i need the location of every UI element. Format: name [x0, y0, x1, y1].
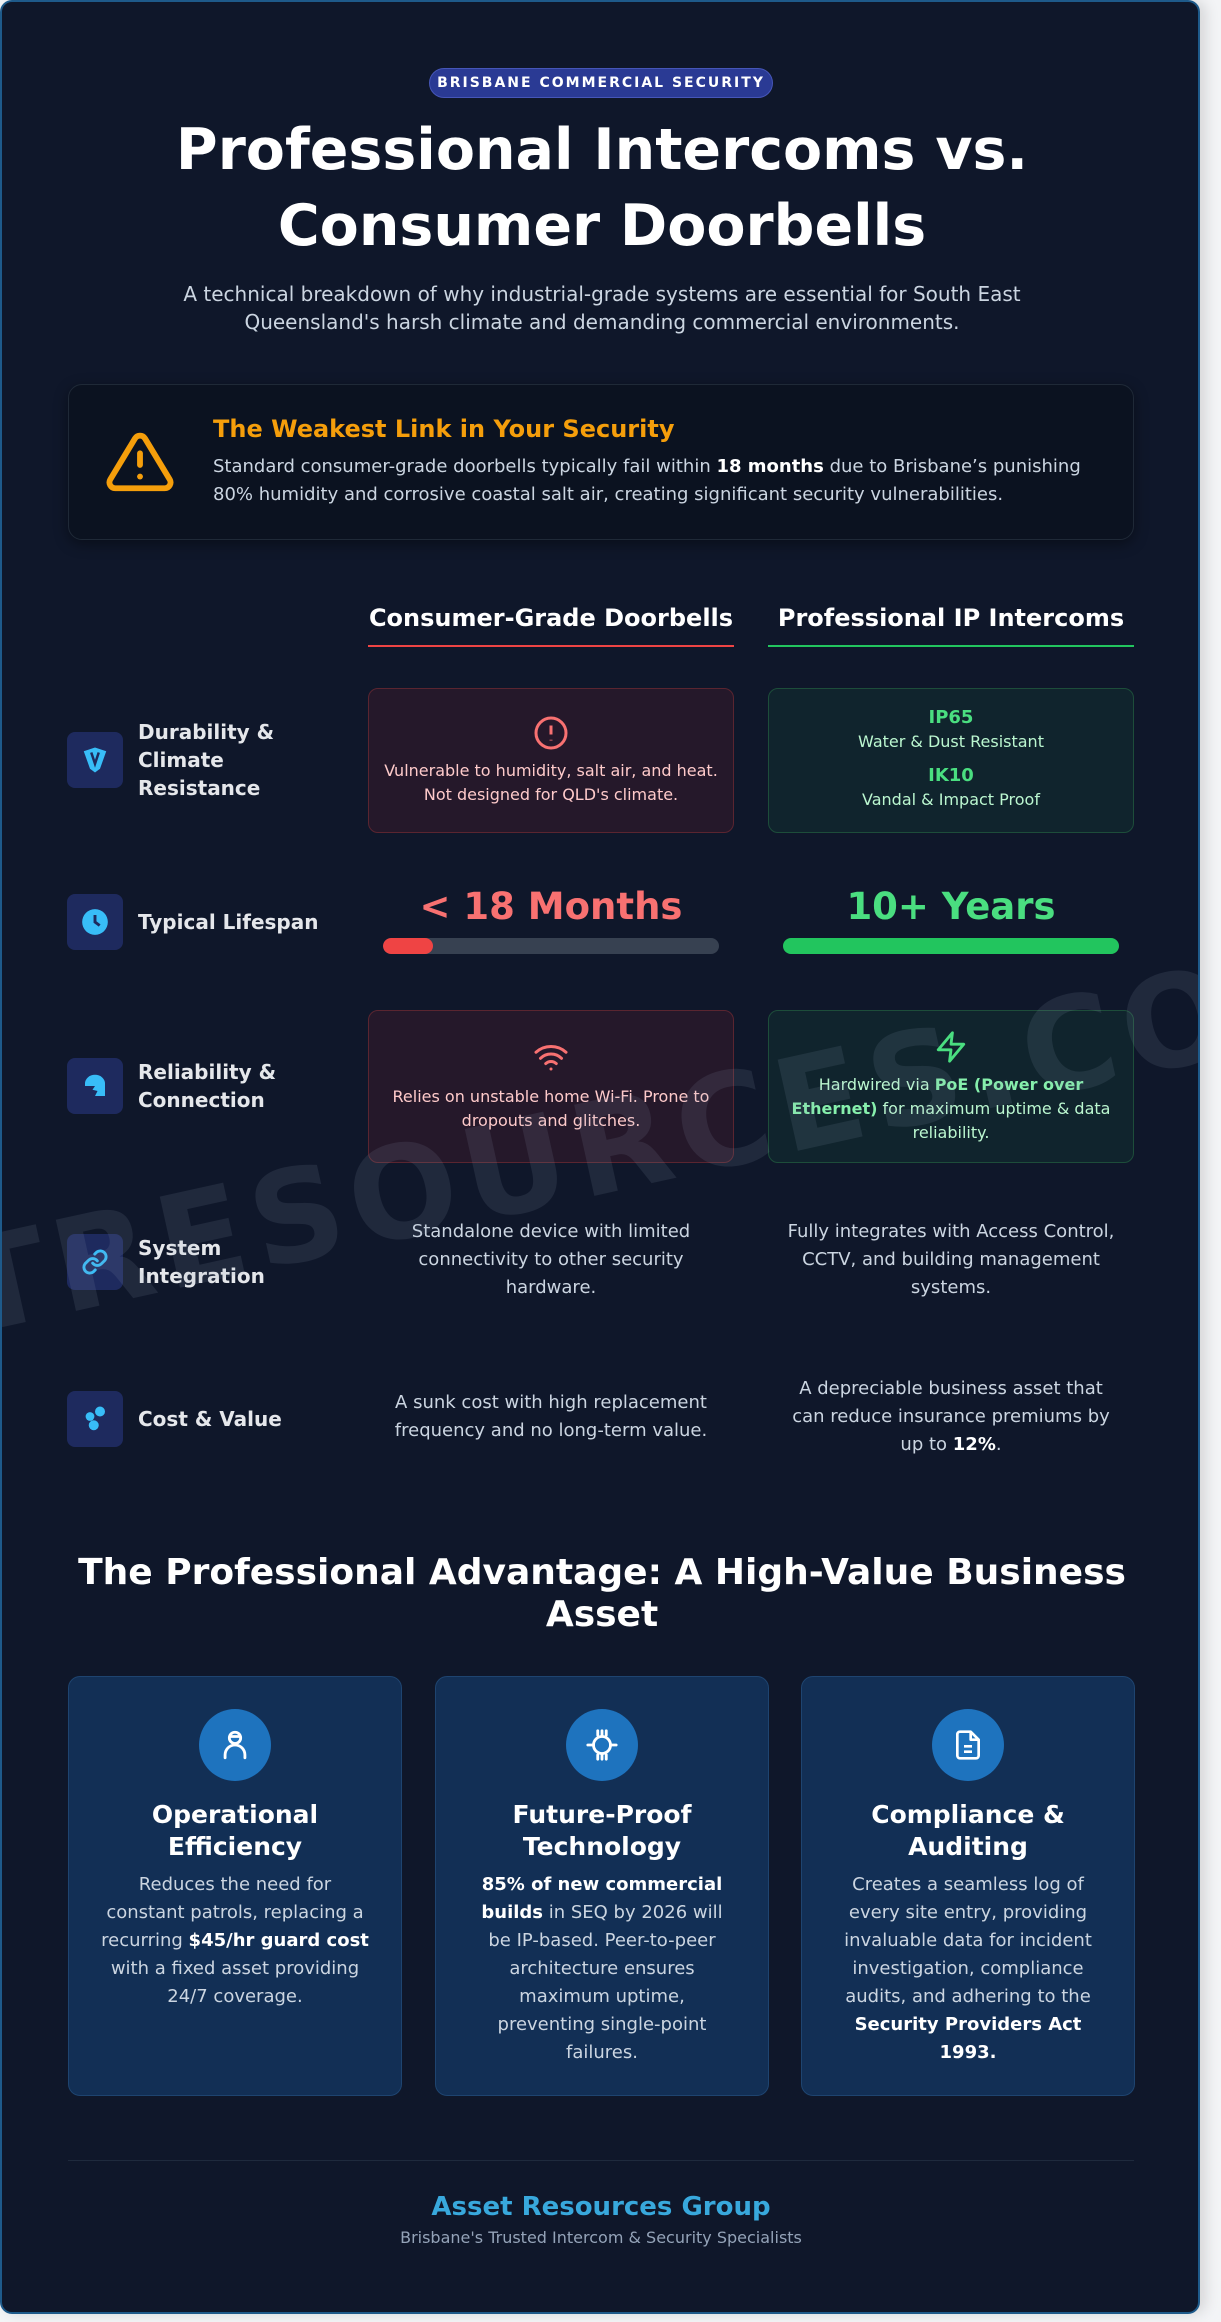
- bar: [783, 938, 1119, 954]
- column header: professional: Professional IP Intercoms: [778, 604, 1124, 632]
- professional durability box: IP65: [929, 707, 973, 728]
- row label: cost: Cost & Value: [138, 1407, 282, 1431]
- footer: Brisbane's Trusted Intercom & Security Specialists: [400, 2228, 802, 2247]
- footer: [400, 2192, 802, 2247]
- professional durability box: [768, 688, 1134, 833]
- consumer reliability box: [368, 1010, 734, 1163]
- card: operational efficiency: Efficiency: [168, 1832, 302, 1861]
- row label: lifespan: Typical Lifespan: [138, 910, 318, 934]
- row label: integration: Integration: [138, 1264, 265, 1288]
- row label: durability: Climate: [138, 748, 224, 772]
- icon: guard: [199, 1709, 271, 1781]
- icon: lightning: [936, 1031, 966, 1063]
- consumer lifespan: [383, 885, 719, 954]
- icon: chip: [566, 1709, 638, 1781]
- professional lifespan: [783, 885, 1119, 954]
- card: operational efficiency: [68, 1676, 402, 2096]
- card: compliance: [801, 1676, 1135, 2096]
- card: future-proof: [435, 1676, 769, 2096]
- icon: warning triangle: [106, 432, 174, 492]
- footer: Asset Resources Group: [431, 2192, 771, 2222]
- row label: durability: Durability &: [138, 720, 274, 744]
- title: Professional Intercoms vs.: [176, 117, 1028, 183]
- subtitle: A technical breakdown of why industrial-grade systems are essential for South East Queensland's harsh climate and demanding commercial environments.: [183, 282, 1021, 334]
- icon: wifi: [534, 1045, 568, 1070]
- callout text: Standard consumer-grade doorbells typically fail within 18 months due to Brisbane’s punishing 80% humidity and corrosive coastal salt air, creating significant security vulnerabilities.: [213, 456, 1081, 505]
- professional cost text: A depreciable business asset that can reduce insurance premiums by up to 12%.: [792, 1378, 1110, 1455]
- row label: integration: System: [138, 1236, 221, 1260]
- section heading: The Professional Advantage: A High-Value Business Asset: [78, 1552, 1126, 1635]
- column header: consumer: Consumer-Grade Doorbells: [369, 604, 733, 632]
- row label: durability: Resistance: [138, 776, 260, 800]
- row label: integration: [67, 1234, 265, 1290]
- consumer durability box: Vulnerable to humidity, salt air, and heat.: [384, 761, 718, 780]
- consumer durability box: Not designed for QLD's climate.: [424, 785, 678, 804]
- card: operational efficiency: Reduces the need for constant patrols, replacing a recurring $45/hr guard cost with a fixed asset providing 24/7 coverage.: [101, 1874, 369, 2007]
- row label: reliability: Connection: [138, 1088, 265, 1112]
- professional lifespan: 10+ Years: [846, 885, 1056, 928]
- professional durability box: Vandal & Impact Proof: [862, 790, 1040, 809]
- card: compliance: Compliance &: [871, 1800, 1065, 1829]
- card: future-proof: Future-Proof: [513, 1800, 691, 1829]
- row label: cost: [67, 1391, 282, 1447]
- consumer lifespan: < 18 Months: [420, 885, 682, 928]
- icon: alert circle: [534, 716, 568, 750]
- consumer cost text: A sunk cost with high replacement frequency and no long-term value.: [395, 1392, 707, 1441]
- title: Consumer Doorbells: [278, 193, 926, 259]
- card: compliance: Creates a seamless log of every site entry, providing invaluable data for incident investigation, compliance audits, and adhering to the Security Providers Act 1993.: [844, 1874, 1092, 2063]
- row label: lifespan: [67, 894, 318, 950]
- consumer durability box: [368, 688, 734, 833]
- professional reliability box: [768, 1010, 1134, 1163]
- row label: durability: [67, 720, 274, 800]
- card: operational efficiency: Operational: [152, 1800, 318, 1829]
- card: future-proof: 85% of new commercial builds in SEQ by 2026 will be IP-based. Peer-to-peer architecture ensures maximum uptime, preventing single-point failures.: [481, 1874, 723, 2063]
- professional durability box: Water & Dust Resistant: [858, 732, 1044, 751]
- bar: [383, 938, 719, 954]
- consumer integration text: Standalone device with limited connectivity to other security hardware.: [412, 1221, 690, 1298]
- icon: document: [932, 1709, 1004, 1781]
- warning callout: [68, 384, 1134, 540]
- professional integration text: Fully integrates with Access Control, CCTV, and building management systems.: [788, 1221, 1114, 1298]
- consumer reliability box: Relies on unstable home Wi-Fi. Prone to dropouts and glitches.: [393, 1087, 709, 1130]
- badge: [429, 68, 773, 98]
- professional durability box: IK10: [928, 765, 974, 786]
- column header: professional: [768, 604, 1134, 647]
- title: [176, 117, 1028, 259]
- card: compliance: Auditing: [908, 1832, 1028, 1861]
- row label: reliability: Reliability &: [138, 1060, 276, 1084]
- row label: reliability: [67, 1058, 276, 1114]
- card: future-proof: Technology: [523, 1832, 681, 1861]
- callout heading: The Weakest Link in Your Security: [213, 415, 674, 443]
- professional reliability box: Hardwired via PoE (Power over Ethernet) for maximum uptime & data reliability.: [792, 1075, 1110, 1142]
- badge: BRISBANE COMMERCIAL SECURITY: [437, 75, 765, 91]
- column header: consumer: [368, 604, 734, 647]
